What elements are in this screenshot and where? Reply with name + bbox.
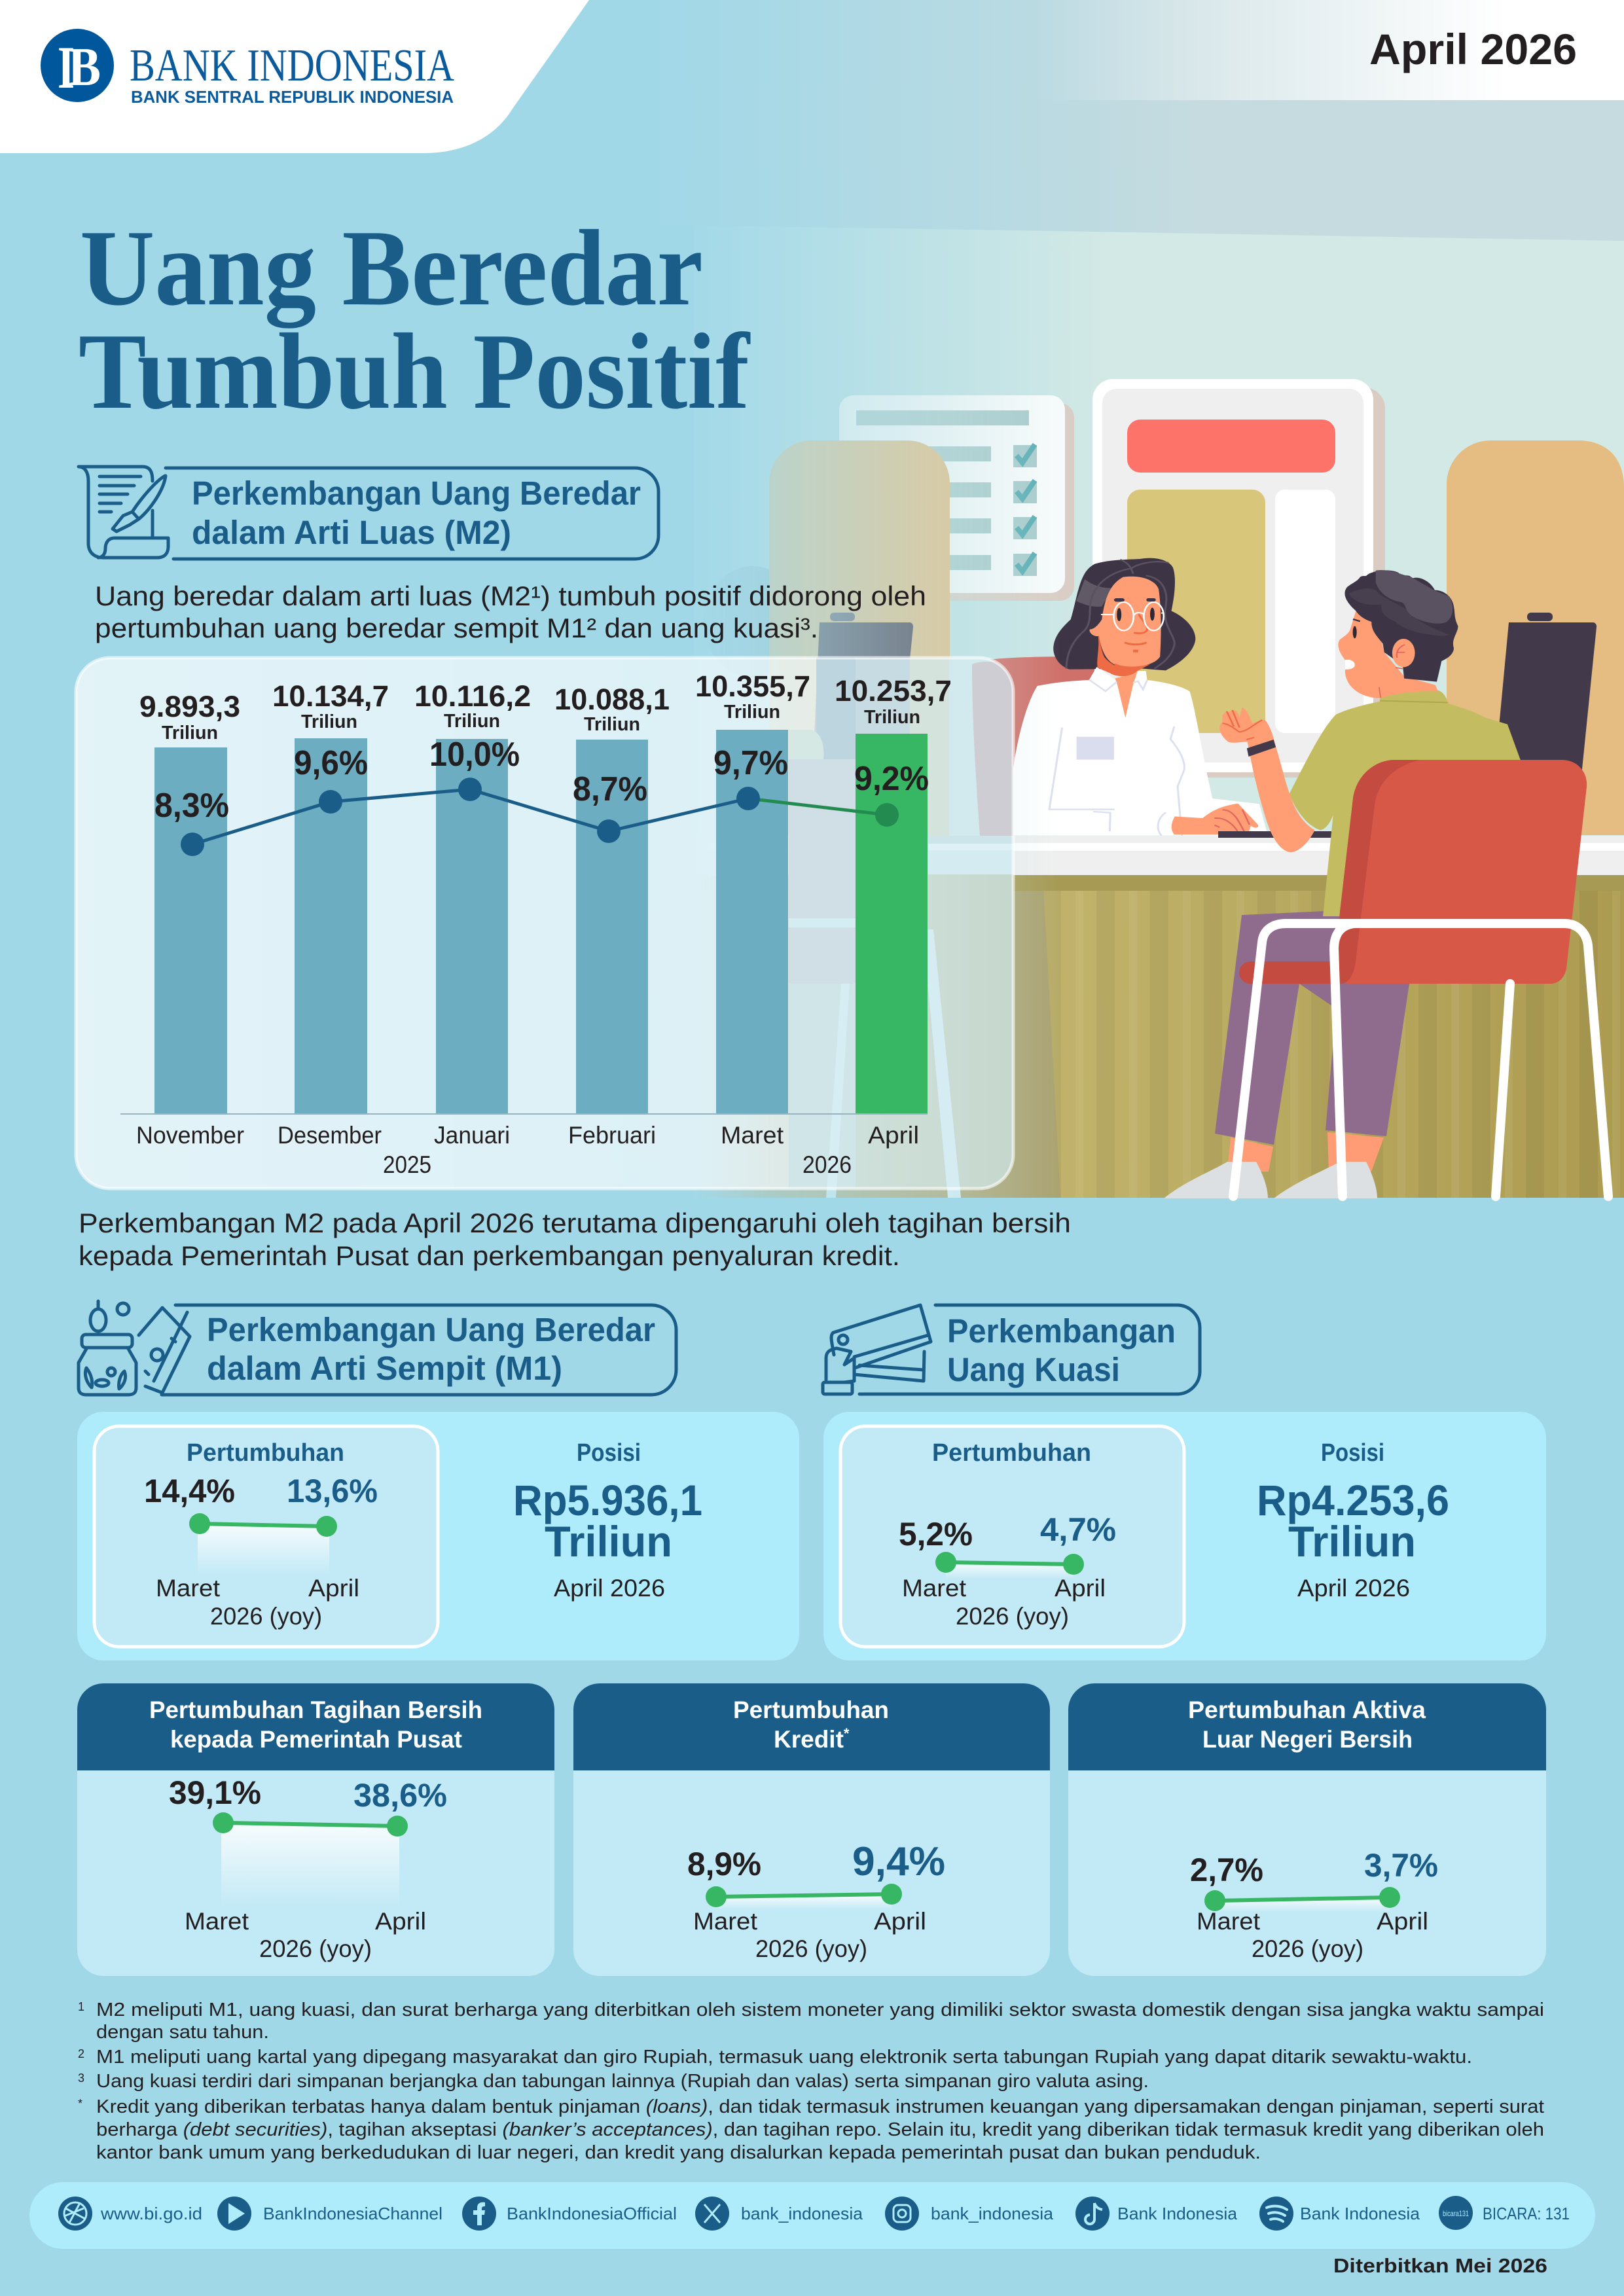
icon: jar and banknote — [79, 1301, 190, 1395]
panel border — [76, 658, 1013, 1189]
bar value labels: Triliun — [864, 707, 920, 728]
card: Kredit — [573, 1683, 1050, 1976]
position: M1: Posisi — [577, 1439, 641, 1467]
card: Aktiva Luar Negeri: 2,7% — [1190, 1852, 1263, 1888]
growth card: M1: 13,6% — [287, 1473, 378, 1509]
beige wall panels — [769, 440, 950, 835]
position: Uang Kuasi: Posisi — [1321, 1439, 1384, 1467]
section heading: Uang Kuasi: Perkembangan — [947, 1312, 1176, 1350]
summary paragraph: Perkembangan M2 pada April 2026 terutama dipengaruhi oleh tagihan bersih — [79, 1208, 1071, 1238]
icon: hand holding cards — [823, 1305, 931, 1394]
spotify — [1259, 2197, 1420, 2231]
card: Kredit: 8,9% — [687, 1846, 761, 1882]
youtube: BankIndonesiaChannel — [263, 2204, 442, 2223]
growth percent labels: 9,2% — [854, 760, 929, 798]
information board — [1092, 379, 1385, 778]
growth percent labels: 8,7% — [573, 770, 647, 808]
bar value labels: 10.134,7 — [272, 679, 389, 713]
slope chart: M1 — [189, 1513, 337, 1576]
panel: M1 — [77, 1412, 799, 1660]
bar value labels: Triliun — [444, 711, 500, 732]
counter desk — [655, 836, 1624, 1198]
bars — [154, 730, 928, 1114]
footnotes: 3 — [78, 2072, 84, 2085]
bar value labels: Triliun — [584, 714, 640, 735]
growth card: Uang Kuasi: Pertumbuhan — [932, 1439, 1091, 1467]
logo: Bank Indonesia — [41, 29, 454, 107]
x: bank_indonesia — [741, 2204, 863, 2223]
card: Kredit: Kredit — [774, 1726, 844, 1753]
section heading: M1 — [79, 1301, 676, 1395]
bar value labels: 9.893,3 — [139, 690, 240, 723]
card: Tagihan Bersih: 39,1% — [169, 1774, 261, 1811]
position: M1 — [513, 1439, 702, 1602]
back chair legs — [826, 929, 961, 1198]
dark chair right — [1494, 613, 1597, 776]
month labels: November — [136, 1122, 244, 1149]
growth card: M1: 2026 (yoy) — [210, 1603, 322, 1630]
date banner — [1034, 0, 1624, 100]
slope chart: Uang Kuasi — [935, 1552, 1084, 1579]
card: Kredit: 9,4% — [852, 1839, 945, 1884]
card: Aktiva Luar Negeri: Maret — [1197, 1908, 1261, 1935]
keyboard — [1218, 831, 1331, 838]
footnotes: kantor bank umum yang berkedudukan di luar negeri, dan kredit yang disalurkan kepada pemerintah pusat dan bukan penduduk. — [96, 2142, 1261, 2163]
card: Tagihan Bersih: kepada Pemerintah Pusat — [170, 1726, 462, 1753]
instagram: bank_indonesia — [931, 2204, 1054, 2223]
facebook — [462, 2197, 677, 2231]
bar value labels: Triliun — [301, 711, 357, 732]
position: Uang Kuasi — [1257, 1439, 1449, 1602]
bar value labels: Triliun — [724, 702, 780, 723]
footnotes: M2 meliputi M1, uang kuasi, dan surat berharga yang diterbitkan oleh sistem moneter yang dimiliki sektor swasta domestik dengan sisa jangka waktu sampai — [96, 2000, 1544, 2020]
main title — [79, 207, 751, 431]
section heading: M1: Perkembangan Uang Beredar — [207, 1311, 655, 1348]
logo: Bank Indonesia: I — [58, 34, 75, 101]
growth card: Uang Kuasi — [840, 1426, 1184, 1647]
footnotes — [78, 2000, 1544, 2163]
card: Tagihan Bersih: Pertumbuhan Tagihan Bersih — [149, 1696, 482, 1723]
intro paragraph: pertumbuhan uang beredar sempit M1² dan uang kuasi³. — [95, 613, 818, 643]
spotify: Bank Indonesia — [1300, 2204, 1420, 2223]
card: Aktiva Luar Negeri: Luar Negeri Bersih — [1202, 1726, 1413, 1753]
footnotes: 2 — [78, 2047, 84, 2060]
growth card: Uang Kuasi: Maret — [902, 1575, 967, 1602]
footnotes: M1 meliputi uang kartal yang dipegang masyarakat dan giro Rupiah, termasuk uang elektronik serta tabungan Rupiah yang dapat ditarik sewaktu-waktu. — [96, 2047, 1472, 2068]
month labels: Januari — [434, 1122, 510, 1149]
intro paragraph — [95, 581, 926, 643]
illustration: service counter scene — [655, 379, 1624, 1198]
card: Aktiva Luar Negeri: Pertumbuhan Aktiva — [1188, 1696, 1426, 1723]
checklist board — [839, 395, 1074, 601]
client man — [1219, 570, 1523, 916]
card: Aktiva Luar Negeri: April — [1377, 1908, 1428, 1935]
blurred head backdrop — [704, 566, 802, 677]
main title: Uang Beredar — [80, 207, 703, 329]
growth line — [181, 778, 899, 856]
growth percent labels: 9,6% — [294, 744, 368, 782]
card: Aktiva Luar Negeri: 3,7% — [1364, 1847, 1438, 1884]
footnotes: 1 — [78, 2000, 84, 2013]
growth card: M1: Maret — [156, 1575, 221, 1602]
position: M1: Rp5.936,1 — [513, 1476, 702, 1524]
month labels: Maret — [721, 1122, 784, 1149]
month labels: 2025 — [383, 1151, 431, 1178]
card: Tagihan Bersih: April — [375, 1908, 426, 1935]
bicara: BICARA: 131 — [1483, 2204, 1570, 2223]
growth card: M1: 14,4% — [144, 1473, 235, 1509]
client legs — [1164, 910, 1409, 1198]
tiktok: Bank Indonesia — [1117, 2204, 1238, 2223]
panel: Uang Kuasi — [823, 1412, 1546, 1660]
header logo plate — [0, 0, 589, 153]
card: Kredit: * — [844, 1725, 850, 1742]
publication date: Diterbitkan Mei 2026 — [1333, 2254, 1547, 2277]
client chair — [1239, 760, 1587, 984]
section heading: Uang Kuasi: Uang Kuasi — [947, 1351, 1120, 1388]
card: Aktiva Luar Negeri — [1068, 1683, 1546, 1976]
bicara — [1439, 2196, 1570, 2230]
growth card: Uang Kuasi: April — [1055, 1575, 1106, 1602]
footnotes: berharga (debt securities) , tagihan akseptasi (banker’s acceptances) , dan tagihan repo. Selain itu, kredit yang diberikan tidak termasuk kredit yang diberikan oleh — [96, 2119, 1544, 2140]
footnotes: dengan satu tahun. — [96, 2022, 269, 2043]
summary paragraph — [79, 1208, 1071, 1271]
card: Kredit: Pertumbuhan — [733, 1696, 889, 1723]
panel: M2 bar chart — [76, 658, 1013, 1198]
card: Kredit: April — [874, 1908, 926, 1935]
month labels: Desember — [278, 1122, 382, 1149]
logo: Bank Indonesia: BANK SENTRAL REPUBLIK INDONESIA — [131, 87, 454, 107]
date label: April 2026 — [1369, 25, 1577, 73]
slope chart: Kredit — [706, 1884, 902, 1910]
bar value labels: 10.253,7 — [835, 674, 952, 708]
growth card: Uang Kuasi: 4,7% — [1040, 1511, 1116, 1548]
tiktok — [1075, 2197, 1238, 2231]
section heading: M1: dalam Arti Sempit (M1) — [207, 1350, 562, 1387]
main title: Tumbuh Positif — [79, 311, 751, 431]
dark chair left — [814, 613, 914, 732]
axis — [120, 1113, 928, 1115]
growth percent labels: 9,7% — [713, 744, 788, 782]
website: www.bi.go.id — [100, 2204, 202, 2223]
card: Aktiva Luar Negeri: 2026 (yoy) — [1252, 1935, 1363, 1962]
section heading: Uang Kuasi — [823, 1305, 1200, 1394]
teller chair — [990, 656, 1094, 767]
illustration wall — [694, 226, 1624, 1198]
card: Tagihan Bersih — [77, 1683, 554, 1976]
growth card: M1: April — [308, 1575, 359, 1602]
card: Tagihan Bersih: Maret — [185, 1908, 249, 1935]
section heading: M2: Perkembangan Uang Beredar — [192, 475, 641, 512]
month labels: 2026 — [803, 1151, 852, 1178]
section heading: M2: dalam Arti Luas (M2) — [192, 514, 511, 551]
header backdrop band — [589, 0, 1624, 241]
card: Kredit: Maret — [693, 1908, 758, 1935]
instagram — [885, 2197, 1054, 2231]
section heading: M2 — [79, 467, 659, 559]
scene seen through panel — [789, 658, 1013, 1198]
website — [58, 2197, 202, 2231]
bar value labels — [139, 670, 952, 744]
position: Uang Kuasi: Triliun — [1288, 1517, 1416, 1566]
footnotes: Uang kuasi terdiri dari simpanan berjangka dan tabungan lainnya (Rupiah dan valas) serta simpanan giro valuta asing. — [96, 2071, 1149, 2092]
growth card: M1: Pertumbuhan — [187, 1439, 344, 1467]
position: M1: Triliun — [545, 1517, 672, 1566]
slope chart: Aktiva Luar Negeri — [1204, 1887, 1400, 1912]
card: Tagihan Bersih: 2026 (yoy) — [259, 1935, 372, 1962]
logo: Bank Indonesia: B — [68, 37, 101, 98]
teller woman — [1008, 558, 1268, 836]
chair frame — [1233, 924, 1608, 1196]
growth card: M1 — [94, 1426, 438, 1647]
position: M1: April 2026 — [554, 1575, 665, 1602]
growth percent labels: 10,0% — [429, 736, 520, 774]
bar value labels: Triliun — [162, 723, 218, 744]
bar value labels: 10.355,7 — [695, 670, 810, 703]
month labels: April — [868, 1122, 919, 1149]
card: Tagihan Bersih: 38,6% — [353, 1777, 447, 1814]
growth card: Uang Kuasi: 5,2% — [899, 1516, 973, 1552]
intro paragraph: Uang beredar dalam arti luas (M2¹) tumbuh positif didorong oleh — [95, 581, 926, 611]
summary paragraph: kepada Pemerintah Pusat dan perkembangan penyaluran kredit. — [79, 1240, 900, 1271]
growth card: Uang Kuasi: 2026 (yoy) — [956, 1603, 1069, 1630]
x — [695, 2197, 863, 2231]
bar value labels: 10.088,1 — [554, 683, 670, 716]
icon: scroll and pen — [79, 467, 168, 558]
bar value labels: 10.116,2 — [414, 679, 531, 713]
month labels — [136, 1122, 919, 1178]
growth percent labels: 8,3% — [154, 787, 229, 825]
bicara: bicara131 — [1443, 2209, 1469, 2218]
month labels: Februari — [568, 1122, 656, 1149]
logo: Bank Indonesia: BANK INDONESIA — [130, 41, 454, 91]
facebook: BankIndonesiaOfficial — [507, 2204, 677, 2223]
card: Kredit: 2026 (yoy) — [755, 1935, 867, 1962]
slope chart: Tagihan Bersih — [213, 1812, 408, 1909]
footnotes: * — [78, 2097, 82, 2110]
youtube — [217, 2197, 442, 2231]
right beige panel — [1447, 440, 1624, 835]
footnotes: Kredit yang diberikan terbatas hanya dalam bentuk pinjaman (loans), dan tidak termasuk instrumen keuangan yang dipersamakan dengan pinjaman, seperti surat — [96, 2096, 1544, 2117]
position: Uang Kuasi: April 2026 — [1297, 1575, 1410, 1602]
growth percent labels — [154, 736, 929, 825]
social media bar — [29, 2182, 1595, 2249]
position: Uang Kuasi: Rp4.253,6 — [1257, 1476, 1449, 1524]
